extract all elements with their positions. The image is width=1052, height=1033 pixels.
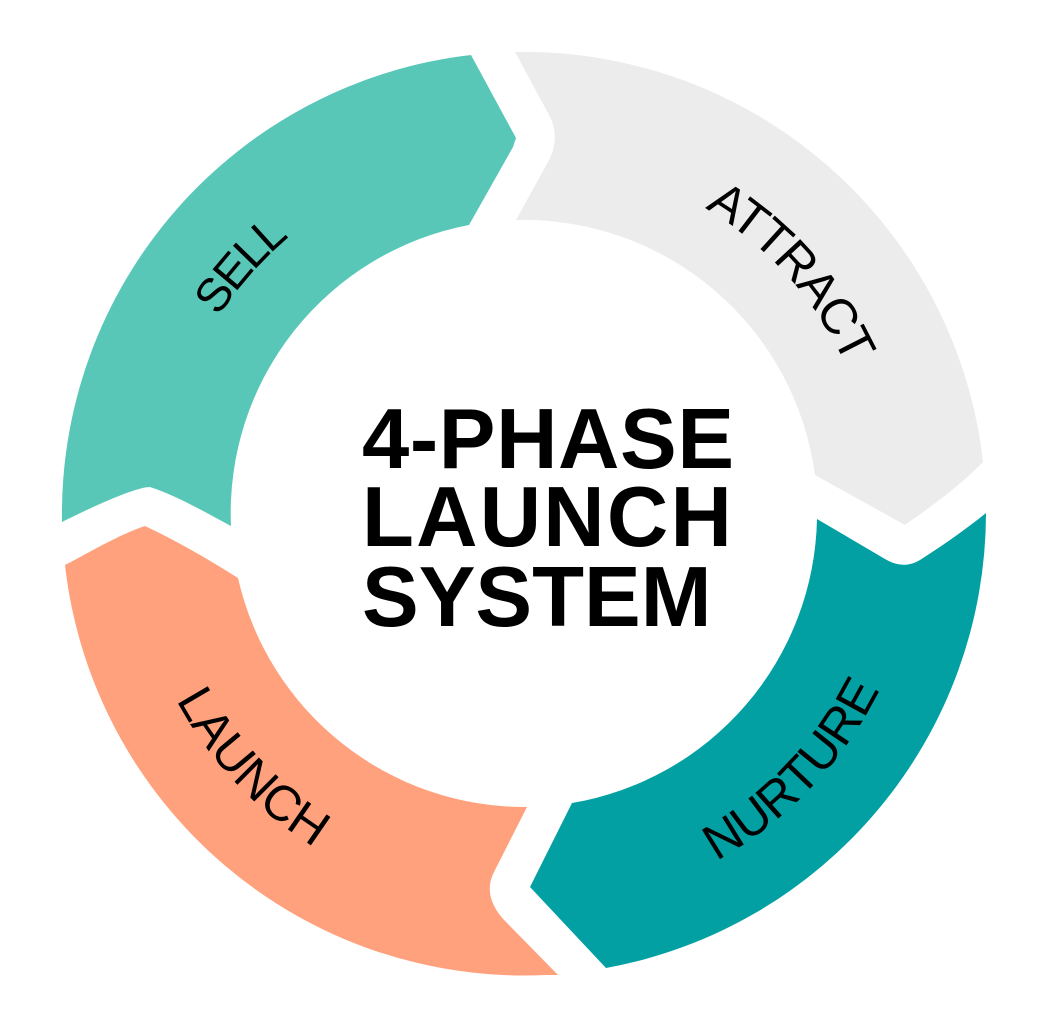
title: LAUNCH (362, 470, 734, 565)
label: sell: SELL (197, 224, 288, 312)
label: attract: ATTRACT (705, 186, 876, 354)
panel: nurture segment (530, 513, 986, 968)
label: launch: LAUNCH (178, 686, 330, 846)
panel: sell segment (62, 55, 516, 526)
title: SYSTEM (362, 550, 712, 645)
panel: attract segment (515, 52, 983, 525)
title: 4-PHASE (362, 392, 735, 487)
label: nurture: NURTURE (702, 676, 879, 859)
title (362, 392, 735, 645)
panel: launch segment (65, 526, 558, 976)
